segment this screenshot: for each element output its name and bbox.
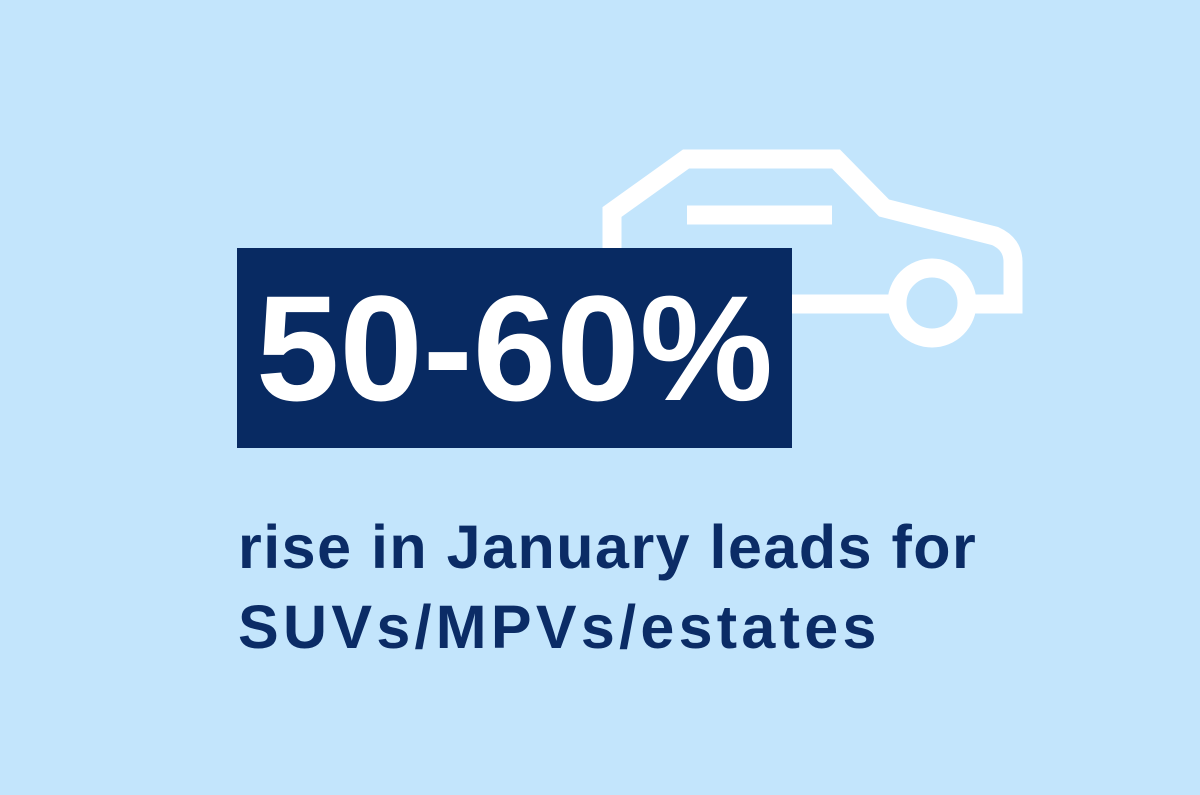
stat box <box>237 248 792 448</box>
caption text <box>238 513 977 661</box>
big number: 50-60% <box>256 264 773 432</box>
caption text: SUVs/MPVs/estates <box>238 593 881 661</box>
caption text: rise in January leads for <box>238 513 977 581</box>
